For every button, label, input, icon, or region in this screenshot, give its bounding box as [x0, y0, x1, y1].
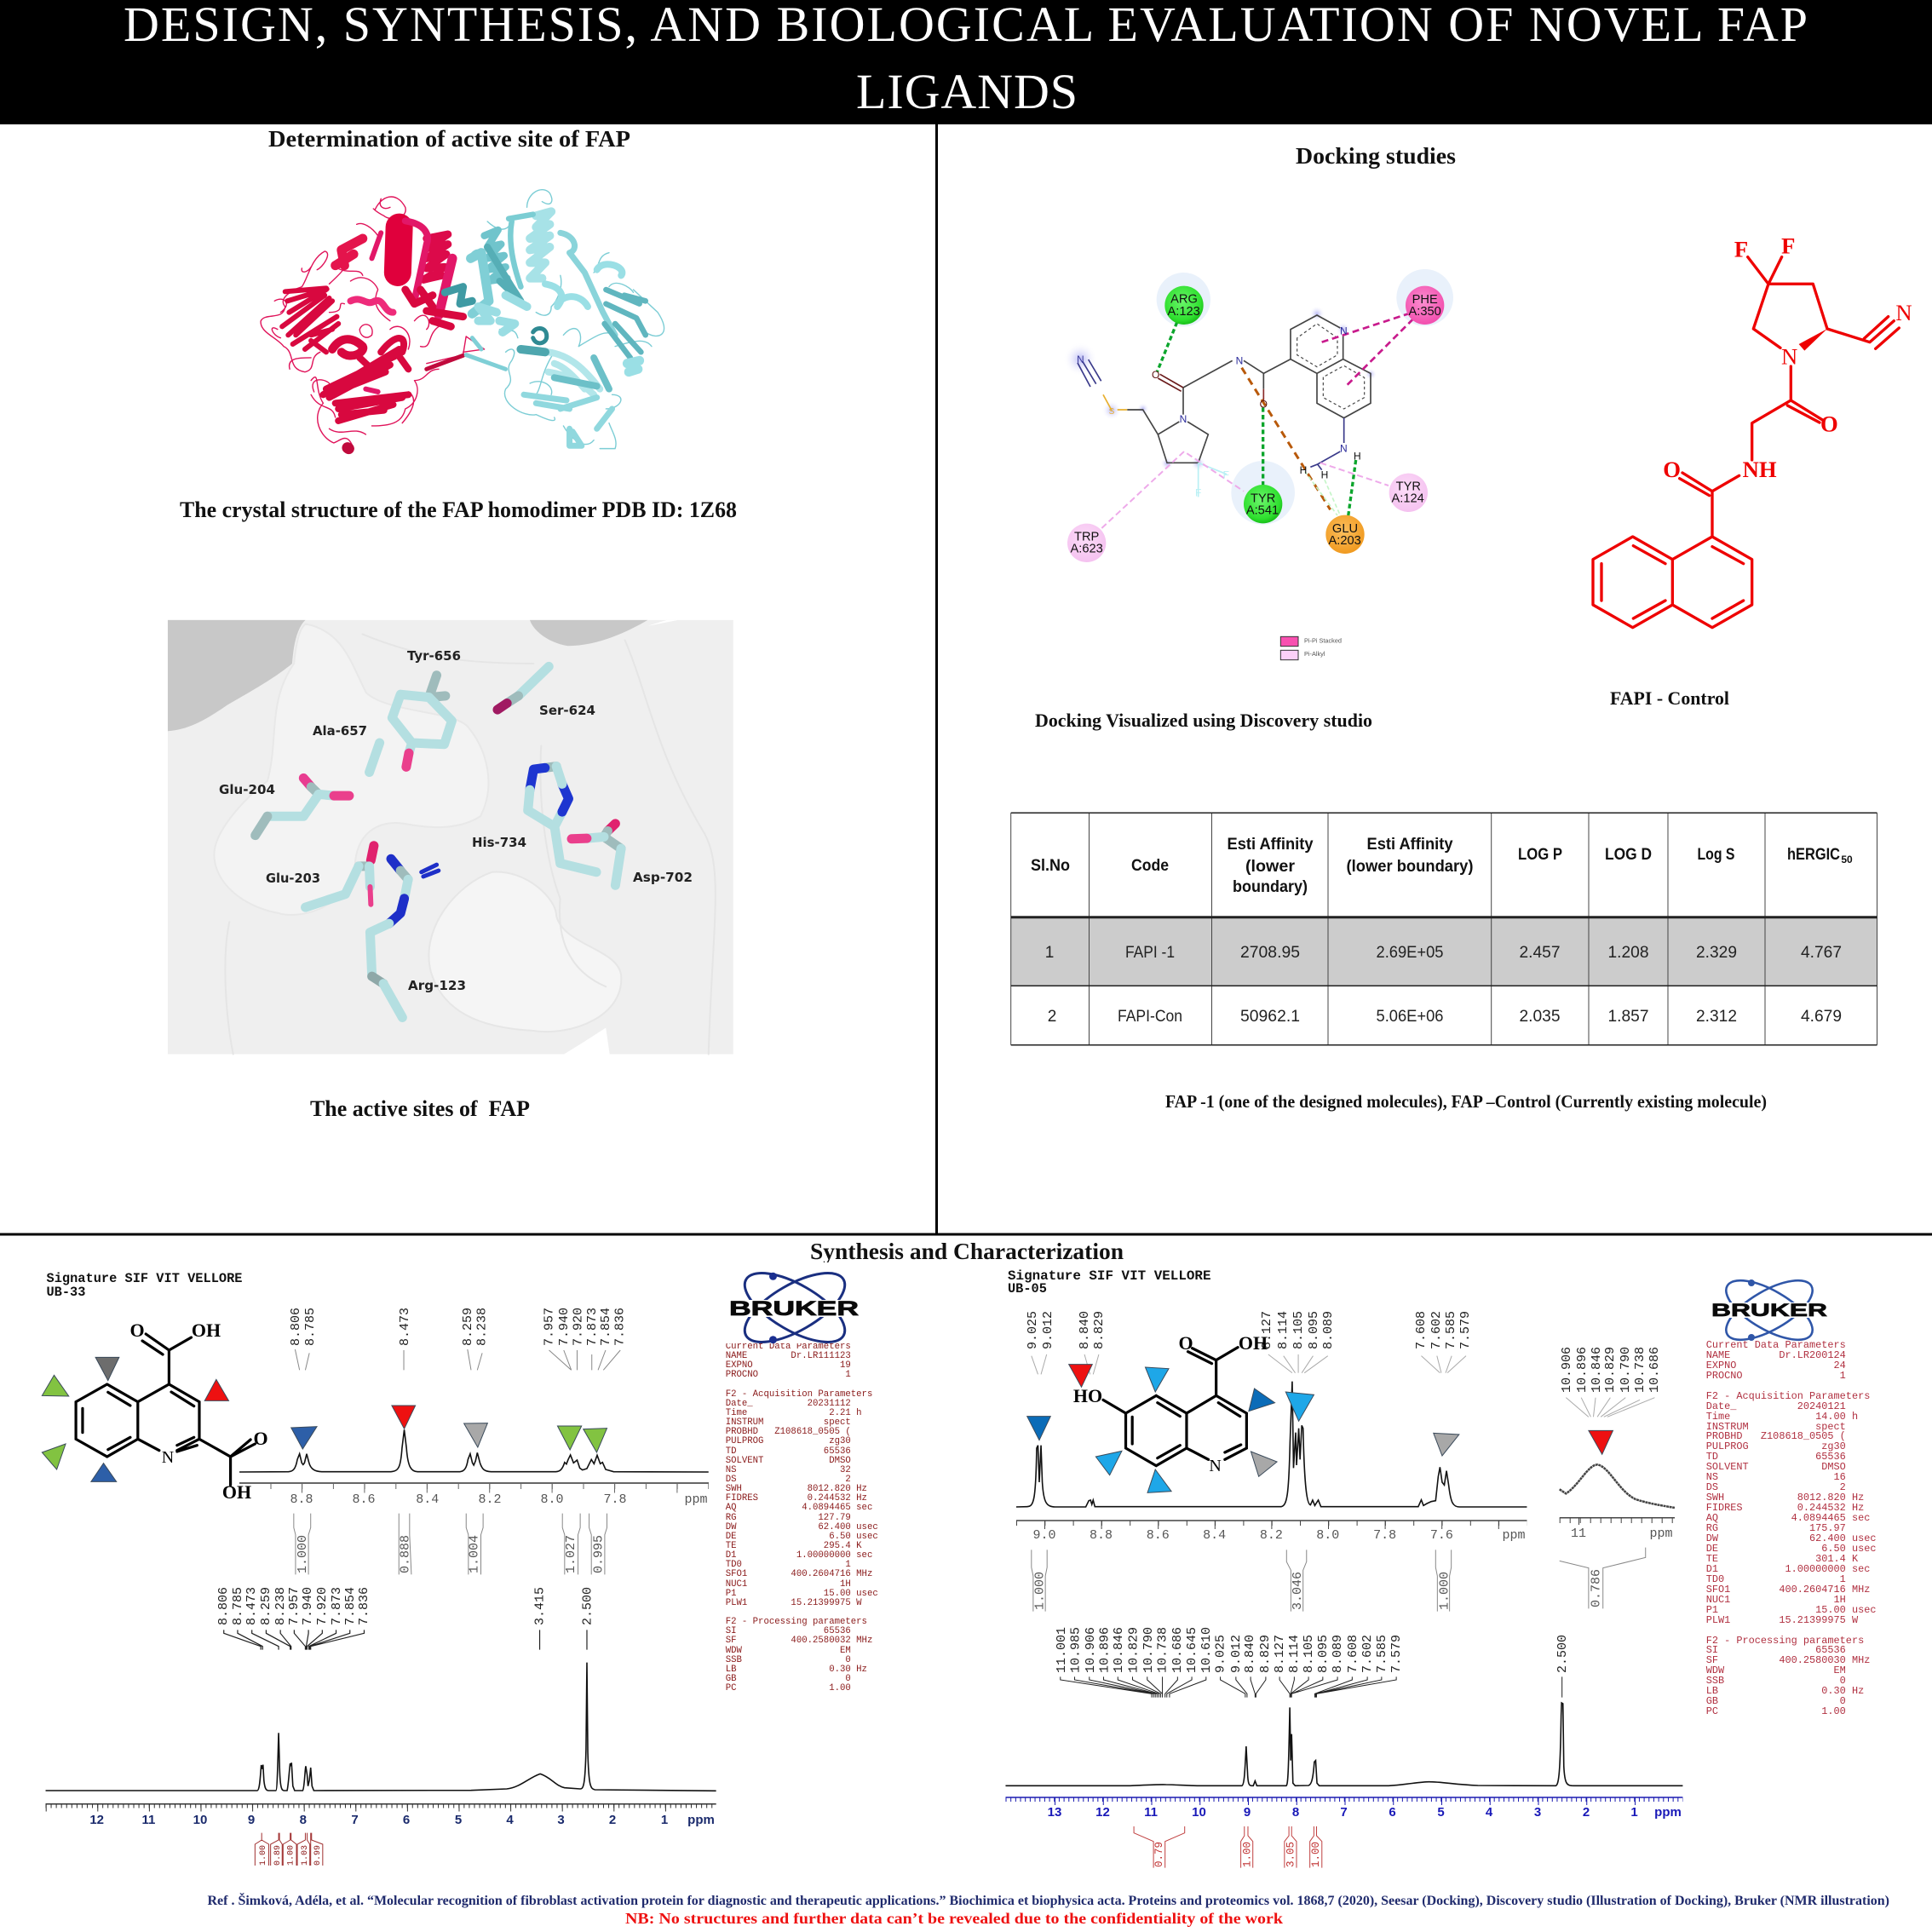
full spectrum integrals: 1.00: [287, 1845, 296, 1866]
full spectrum axis labels: 5: [455, 1813, 462, 1827]
full spectrum axis labels: 4: [506, 1813, 514, 1827]
full spectrum axis labels: 12: [1095, 1805, 1110, 1820]
spectrum trace: [239, 1349, 709, 1472]
heading: docking studies: Docking studies: [1296, 143, 1456, 169]
axis tick labels: ppm: [1649, 1527, 1673, 1541]
full spectrum axis labels: 7: [1340, 1805, 1348, 1820]
table row FAPI -1: FAPI -1: [1125, 944, 1175, 962]
peak shift labels: [289, 1308, 628, 1346]
cyan monomer: [445, 190, 664, 449]
peak shift labels: 8.105: [1291, 1311, 1306, 1349]
atom labels: [1077, 325, 1361, 499]
atom labels: H: [1300, 464, 1307, 476]
table row FAPI-Con: FAPI-Con: [1118, 1008, 1182, 1026]
full spectrum axis labels: [1048, 1805, 1682, 1820]
table header row: (lower: [1245, 858, 1296, 876]
axis tick labels: 8.6: [1147, 1528, 1170, 1543]
axis tick labels: 11: [1571, 1527, 1586, 1541]
peak shift labels: 7.836: [613, 1308, 628, 1346]
FAPI control molecule: NH: [1743, 457, 1777, 482]
FAPI control molecule: [1593, 233, 1912, 628]
full spectrum integrals: 0.89: [273, 1845, 283, 1866]
FAPI control molecule: N: [1895, 300, 1912, 325]
atom labels: N: [1236, 354, 1243, 366]
residue nodes: A:124: [1392, 492, 1424, 506]
table header row: (lower boundary): [1346, 858, 1474, 876]
full spectrum shift labels: 10.985: [1068, 1627, 1084, 1673]
hydroxyquinoline acid structure: [1073, 1332, 1268, 1475]
peak shift labels: 7.854: [599, 1308, 613, 1346]
residue nodes: GLU: [1332, 522, 1358, 536]
table row FAPI-Con: [1048, 1008, 1842, 1026]
full spectrum axis labels: 4: [1486, 1805, 1493, 1820]
table row FAPI -1: 4.767: [1801, 944, 1842, 962]
table row FAPI-Con: 2: [1048, 1008, 1056, 1026]
full spectrum shift labels: 9.025: [1213, 1635, 1228, 1673]
peak shift labels: 8.785: [303, 1308, 318, 1346]
full spectrum shift labels: 7.957: [287, 1587, 302, 1625]
axis tick labels: [290, 1492, 708, 1507]
residue labels: Glu-204: [219, 782, 275, 797]
full spectrum axis labels: [89, 1813, 715, 1827]
quinoline dicarboxylic acid structure: N: [162, 1448, 174, 1467]
atom labels: N: [1180, 413, 1187, 425]
axis tick labels: 8.2: [1260, 1528, 1283, 1543]
full spectrum integrals: 1.00: [1310, 1842, 1322, 1867]
full spectrum integrals: 0.99: [313, 1845, 323, 1866]
peak shift labels: 8.095: [1307, 1311, 1321, 1349]
peak shift labels: 7.602: [1429, 1311, 1444, 1349]
integrals: [294, 1514, 607, 1574]
integrals: 1.000: [1438, 1572, 1452, 1610]
full spectrum shift labels: 10.610: [1199, 1627, 1214, 1673]
full spectrum shift labels: 2.500: [1555, 1635, 1570, 1673]
full spectrum axis labels: 2: [1583, 1805, 1590, 1820]
Bruker logo UB-33: [726, 1260, 862, 1355]
table header row: Sl.No: [1031, 857, 1070, 875]
axis tick labels: 7.6: [1430, 1528, 1453, 1543]
peak shift labels: 10.906: [1560, 1347, 1574, 1393]
table header row: [1031, 836, 1853, 896]
full spectrum axis labels: 3: [1534, 1805, 1541, 1820]
full spectrum shift labels: 8.785: [231, 1587, 245, 1625]
axis tick labels: 9.0: [1032, 1528, 1056, 1543]
full spectrum trace: [46, 1630, 716, 1791]
full spectrum shift labels: 8.095: [1316, 1635, 1331, 1673]
table row FAPI -1: [1045, 944, 1842, 962]
quinoline dicarboxylic acid structure: OH: [192, 1320, 221, 1341]
hydroxyquinoline acid structure: OH: [1239, 1332, 1268, 1354]
atom labels: H: [1354, 450, 1361, 462]
full spectrum shift labels: 8.089: [1331, 1635, 1345, 1673]
full spectrum integrals: [255, 1833, 323, 1866]
full spectrum shift labels: 8.114: [1287, 1635, 1302, 1673]
peak shift labels: 8.473: [398, 1308, 412, 1346]
peak shift labels: 7.585: [1444, 1311, 1458, 1349]
full spectrum shift labels: 7.602: [1360, 1635, 1375, 1673]
red monomer: [261, 197, 485, 449]
table header row: 50: [1841, 854, 1853, 865]
peak shift labels: 7.608: [1414, 1311, 1429, 1349]
full spectrum shift labels: [216, 1587, 595, 1625]
axis tick labels: 8.0: [540, 1492, 564, 1507]
table row FAPI-Con: 4.679: [1801, 1008, 1842, 1026]
axis tick labels: 7.8: [1373, 1528, 1396, 1543]
full spectrum trace: [1005, 1676, 1682, 1785]
hydroxyquinoline acid structure: N: [1209, 1457, 1222, 1475]
peak shift labels: 8.829: [1092, 1311, 1107, 1349]
full spectrum shift labels: 8.238: [273, 1587, 288, 1625]
signature text: UB-05: [1008, 1281, 1047, 1297]
properties table: [1011, 813, 1877, 1045]
peak shift labels: [1026, 1311, 1662, 1393]
title banner: [0, 0, 1932, 124]
full spectrum shift labels: 10.829: [1126, 1627, 1141, 1673]
atom labels: N: [1077, 354, 1084, 365]
peak shift labels: 9.012: [1041, 1311, 1055, 1349]
table row FAPI -1: 1.208: [1608, 944, 1649, 962]
peak shift labels: 10.790: [1619, 1347, 1633, 1393]
peak shift labels: 10.738: [1633, 1347, 1647, 1393]
peak shift labels: 10.686: [1647, 1347, 1662, 1393]
table row FAPI -1: 1: [1045, 944, 1054, 962]
full spectrum axis labels: 1: [1630, 1805, 1638, 1820]
residue nodes: A:623: [1071, 542, 1103, 555]
atom labels: N: [1340, 325, 1348, 337]
peak shift labels: 9.025: [1026, 1311, 1040, 1349]
title banner: LIGANDS: [856, 64, 1078, 119]
residue labels: Asp-702: [633, 870, 693, 885]
atom labels: H: [1321, 469, 1328, 481]
table header row: Log S: [1697, 846, 1734, 864]
atom labels: F: [1223, 469, 1229, 481]
table row FAPI-Con: 2.035: [1520, 1008, 1561, 1026]
Bruker logo UB-33: BRUKER: [729, 1297, 859, 1320]
full spectrum axis labels: 1: [661, 1813, 668, 1827]
axis tick labels: 8.8: [1090, 1528, 1113, 1543]
residue labels: [219, 648, 693, 993]
full spectrum shift labels: 10.896: [1097, 1627, 1113, 1673]
full spectrum axis labels: 6: [1389, 1805, 1396, 1820]
full spectrum shift labels: 8.259: [259, 1587, 273, 1625]
full spectrum shift labels: 11.001: [1055, 1627, 1069, 1673]
peak shift labels: 8.806: [289, 1308, 303, 1346]
signature text: Signature SIF VIT VELLORE: [46, 1271, 242, 1286]
full spectrum integrals: 1.00: [259, 1845, 268, 1866]
acquisition parameters UB-05: Current Data Parameters NAME Dr.LR200124 EXPNO 24 PROCNO 1 F2 - Acquisition Parameters Date_ 20240121 Time 14.00 h INSTRUM spect PROBHD Z108618_0505 ( PULPROG zg30 TD 65536 SOLVENT DMSO NS 16 DS 2 SWH 8012.820 Hz FIDRES 0.244532 Hz AQ 4.0894465 sec RG 175.97 DW 62.400 usec DE 6.50 usec TE 301.4 K D1 1.00000000 sec TD0 1 SFO1 400.2604716 MHz NUC1 1H P1 15.00 usec PLW1 15.21399975 W F2 - Processing parameters SI 65536 SF 400.2580030 MHz WDW EM SSB 0 LB 0.30 Hz GB 0 PC 1.00: [1706, 1339, 1876, 1717]
atom labels: S: [1109, 407, 1115, 417]
full spectrum shift labels: 8.840: [1243, 1635, 1257, 1673]
legend: Pi-Pi Stacked: [1304, 636, 1342, 644]
atom labels: O: [1260, 398, 1268, 410]
axis tick labels: 8.4: [1203, 1528, 1226, 1543]
residue labels: His-734: [472, 835, 526, 850]
signature text: UB-33: [46, 1285, 85, 1300]
full spectrum axis labels: 2: [609, 1813, 616, 1827]
peak shift labels: 10.896: [1575, 1347, 1590, 1393]
stick residues: [256, 666, 621, 1017]
full spectrum shift labels: 7.873: [330, 1587, 344, 1625]
table header row: Code: [1131, 857, 1169, 875]
signature text: Signature SIF VIT VELLORE: [1008, 1268, 1211, 1284]
full spectrum shift labels: 7.579: [1389, 1635, 1404, 1673]
residue nodes: TYR: [1251, 492, 1275, 505]
active site surface panel: [168, 620, 733, 1055]
peak shift labels: 7.957: [542, 1308, 557, 1346]
peak shift labels: 8.840: [1078, 1311, 1092, 1349]
full spectrum shift labels: 7.940: [301, 1587, 315, 1625]
full spectrum axis labels: 12: [89, 1813, 104, 1827]
full spectrum shift labels: 7.608: [1346, 1635, 1360, 1673]
full spectrum axis labels: 3: [557, 1813, 565, 1827]
table header row: LOG P: [1518, 846, 1562, 864]
spectrum trace: [1016, 1354, 1675, 1508]
axis tick labels: [1032, 1527, 1673, 1543]
Bruker logo UB-05: BRUKER: [1711, 1301, 1827, 1320]
full spectrum shift labels: 7.854: [343, 1587, 358, 1625]
residue labels: Ser-624: [539, 703, 595, 718]
full spectrum axis labels: 9: [1244, 1805, 1251, 1820]
atom labels: O: [1152, 369, 1159, 381]
assignment triangles: [1027, 1365, 1613, 1492]
residue labels: Glu-203: [266, 871, 320, 886]
NMR UB-33 full spectrum: [46, 1587, 716, 1866]
peak shift labels: 7.579: [1458, 1311, 1473, 1349]
caption: active sites: The active sites of FAP: [310, 1096, 530, 1121]
table row FAPI -1: 2.69E+05: [1377, 944, 1443, 962]
residue nodes: ARG: [1170, 292, 1198, 306]
axis tick labels: 8.6: [352, 1492, 376, 1507]
full spectrum axis labels: 6: [403, 1813, 410, 1827]
full spectrum shift labels: 2.500: [581, 1587, 595, 1625]
residue nodes: A:541: [1246, 504, 1279, 518]
integrals: 1.000: [1032, 1572, 1048, 1610]
peak shift labels: 8.259: [461, 1308, 475, 1346]
integrals: 0.995: [592, 1535, 607, 1573]
full spectrum shift labels: 8.806: [216, 1587, 231, 1625]
FAPI control molecule: F: [1734, 237, 1748, 262]
hydroxyquinoline acid structure: O: [1178, 1332, 1193, 1354]
assignment triangles: [42, 1357, 607, 1481]
quinoline dicarboxylic acid structure: OH: [222, 1481, 251, 1503]
integrals: 0.786: [1590, 1569, 1603, 1607]
table row FAPI -1: 2.457: [1520, 944, 1561, 962]
full spectrum shift labels: 10.738: [1155, 1627, 1170, 1673]
quinoline dicarboxylic acid structure: O: [129, 1320, 145, 1341]
peak shift labels: 7.920: [571, 1308, 586, 1346]
quinoline dicarboxylic acid structure: O: [253, 1428, 268, 1449]
full spectrum shift labels: 10.846: [1112, 1627, 1126, 1673]
FAPI control molecule: O: [1820, 411, 1838, 437]
table row FAPI -1: 2708.95: [1240, 944, 1300, 962]
full spectrum axis labels: 13: [1048, 1805, 1061, 1820]
peak shift labels: 7.940: [557, 1308, 572, 1346]
residue nodes: A:123: [1168, 305, 1200, 319]
full spectrum axis labels: 10: [193, 1813, 207, 1827]
full spectrum shift labels: 8.105: [1302, 1635, 1316, 1673]
caption: crystal structure: The crystal structure of the FAP homodimer PDB ID: 1Z68: [180, 497, 737, 522]
axis tick labels: 8.0: [1316, 1528, 1339, 1543]
atom labels: F: [1195, 487, 1201, 499]
full spectrum shift labels: 8.473: [244, 1587, 259, 1625]
full spectrum shift labels: [1055, 1627, 1570, 1673]
full spectrum shift labels: 10.686: [1170, 1627, 1185, 1673]
table row FAPI-Con: 2.312: [1696, 1008, 1737, 1026]
docking interaction diagram: [1063, 269, 1453, 660]
residue labels: Ala-657: [313, 723, 367, 739]
FAPI control molecule: O: [1663, 457, 1681, 482]
NMR UB-05 zoomed spectrum panel: [1008, 1268, 1675, 1612]
table header row: Esti Affinity: [1366, 836, 1453, 854]
residue nodes: A:203: [1329, 534, 1361, 548]
residue nodes: A:350: [1409, 305, 1441, 319]
axis tick labels: ppm: [684, 1492, 708, 1507]
peak shift labels: 8.089: [1321, 1311, 1336, 1349]
full spectrum shift labels: 7.920: [315, 1587, 330, 1625]
full spectrum axis labels: 11: [1144, 1805, 1158, 1820]
reference line: Ref . Šimková, Adéla, et al. “Molecular recognition of fibroblast activation protein for diagnostic and therapeutic applications.” Biochimica et biophysica acta. Proteins and proteomics vol. 1868,7 (2020), Seesar (Docking), Discovery studio (Illustration of Docking), Bruker (NMR illustration): [208, 1894, 1889, 1908]
full spectrum shift labels: 7.585: [1375, 1635, 1389, 1673]
peak shift labels: 8.127: [1260, 1311, 1274, 1349]
integrals: 0.888: [399, 1535, 412, 1573]
Bruker logo UB-05: [1711, 1269, 1827, 1351]
full spectrum shift labels: 3.415: [533, 1587, 547, 1625]
axis tick labels: 8.4: [416, 1492, 439, 1507]
full spectrum shift labels: 10.645: [1185, 1627, 1199, 1673]
residue labels: Tyr-656: [407, 648, 461, 664]
acquisition parameters UB-33: Current Data Parameters NAME Dr.LR111123 EXPNO 19 PROCNO 1 F2 - Acquisition Parameters Date_ 20231112 Time 2.21 h INSTRUM spect PROBHD Z108618_0505 ( PULPROG zg30 TD 65536 SOLVENT DMSO NS 32 DS 2 SWH 8012.820 Hz FIDRES 0.244532 Hz AQ 4.0894465 sec RG 127.79 DW 62.400 usec DE 6.50 usec TE 295.4 K D1 1.00000000 sec TD0 1 SFO1 400.2604716 MHz NUC1 1H P1 15.00 usec PLW1 15.21399975 W F2 - Processing parameters SI 65536 SF 400.2580032 MHz WDW EM SSB 0 LB 0.30 Hz GB 0 PC 1.00: [726, 1342, 878, 1693]
full spectrum integrals: 0.79: [1153, 1842, 1165, 1867]
confidentiality note: NB: No structures and further data can’t be revealed due to the confidentiality of the work: [625, 1910, 1283, 1927]
protein homodimer ribbon structure: [261, 190, 664, 449]
heading: synthesis and characterization: Synthesis and Characterization: [810, 1239, 1124, 1264]
full spectrum shift labels: 9.012: [1229, 1635, 1244, 1673]
legend: [1280, 636, 1342, 660]
full spectrum axis labels: 8: [300, 1813, 307, 1827]
residue labels: Arg-123: [408, 978, 466, 993]
table header row: LOG D: [1605, 846, 1652, 864]
table row FAPI-Con: 1.857: [1608, 1008, 1649, 1026]
full spectrum integrals: 1.03: [301, 1845, 310, 1866]
table row FAPI -1: 2.329: [1696, 944, 1737, 962]
full spectrum integrals: 1.00: [1241, 1842, 1253, 1867]
peak shift labels: 8.238: [475, 1308, 489, 1346]
residue nodes: TRP: [1074, 530, 1099, 543]
integrals: 1.027: [564, 1535, 578, 1573]
integrals: 1.000: [296, 1535, 310, 1573]
full spectrum integrals: 3.05: [1285, 1842, 1297, 1867]
full spectrum axis labels: 5: [1437, 1805, 1445, 1820]
full spectrum shift labels: 8.127: [1273, 1635, 1287, 1673]
full spectrum shift labels: 10.906: [1084, 1627, 1098, 1673]
integrals: [1032, 1548, 1646, 1612]
atom labels: N: [1340, 443, 1348, 455]
peak shift labels: 10.829: [1603, 1347, 1618, 1393]
table row FAPI-Con: 50962.1: [1240, 1008, 1300, 1026]
quinoline dicarboxylic acid structure: [76, 1320, 268, 1503]
table header row: hERGIC: [1787, 846, 1840, 864]
residue nodes: [1067, 286, 1444, 562]
axis tick labels: 8.2: [478, 1492, 502, 1507]
signature text: [46, 1271, 242, 1300]
full spectrum shift labels: 7.836: [357, 1587, 371, 1625]
NMR UB-33 zoomed spectrum panel: [42, 1271, 709, 1574]
table header row: Esti Affinity: [1227, 836, 1314, 854]
axis tick labels: 8.8: [290, 1492, 313, 1507]
full spectrum integrals: [1134, 1826, 1322, 1868]
axis tick labels: ppm: [1502, 1528, 1526, 1543]
heading: determination of active site: Determination of active site of FAP: [268, 126, 630, 152]
full spectrum axis labels: 9: [248, 1813, 255, 1827]
residue nodes: TYR: [1396, 480, 1421, 494]
signature text: [1008, 1268, 1211, 1297]
full spectrum axis labels: 11: [141, 1813, 155, 1827]
full spectrum axis labels: 7: [351, 1813, 359, 1827]
table footnote: FAP -1 (one of the designed molecules), FAP –Control (Currently existing molecule): [1165, 1091, 1767, 1112]
full spectrum axis labels: ppm: [1654, 1805, 1682, 1820]
FAPI control molecule: F: [1781, 233, 1795, 258]
hydroxyquinoline acid structure: HO: [1073, 1385, 1102, 1406]
peak shift labels: 7.873: [585, 1308, 600, 1346]
full spectrum shift labels: 8.829: [1258, 1635, 1273, 1673]
table header row: boundary): [1233, 878, 1308, 896]
peak shift labels: 8.114: [1276, 1311, 1291, 1349]
full spectrum shift labels: 10.790: [1141, 1627, 1156, 1673]
integrals: 1.004: [468, 1535, 482, 1573]
caption: FAPI control: FAPI - Control: [1610, 687, 1729, 709]
peak shift labels: 10.846: [1590, 1347, 1604, 1393]
full spectrum axis labels: 8: [1292, 1805, 1299, 1820]
full spectrum axis labels: ppm: [687, 1813, 715, 1827]
caption: docking visualized: Docking Visualized using Discovery studio: [1035, 710, 1372, 731]
legend: Pi-Alkyl: [1304, 650, 1325, 658]
residue nodes: PHE: [1412, 293, 1438, 307]
full spectrum axis labels: 10: [1192, 1805, 1206, 1820]
table row FAPI-Con: 5.06E+06: [1377, 1008, 1443, 1026]
axis tick labels: 7.8: [603, 1492, 627, 1507]
integrals: 3.046: [1291, 1572, 1305, 1610]
NMR UB-05 full spectrum: [1005, 1627, 1682, 1868]
FAPI control molecule: N: [1781, 343, 1797, 369]
